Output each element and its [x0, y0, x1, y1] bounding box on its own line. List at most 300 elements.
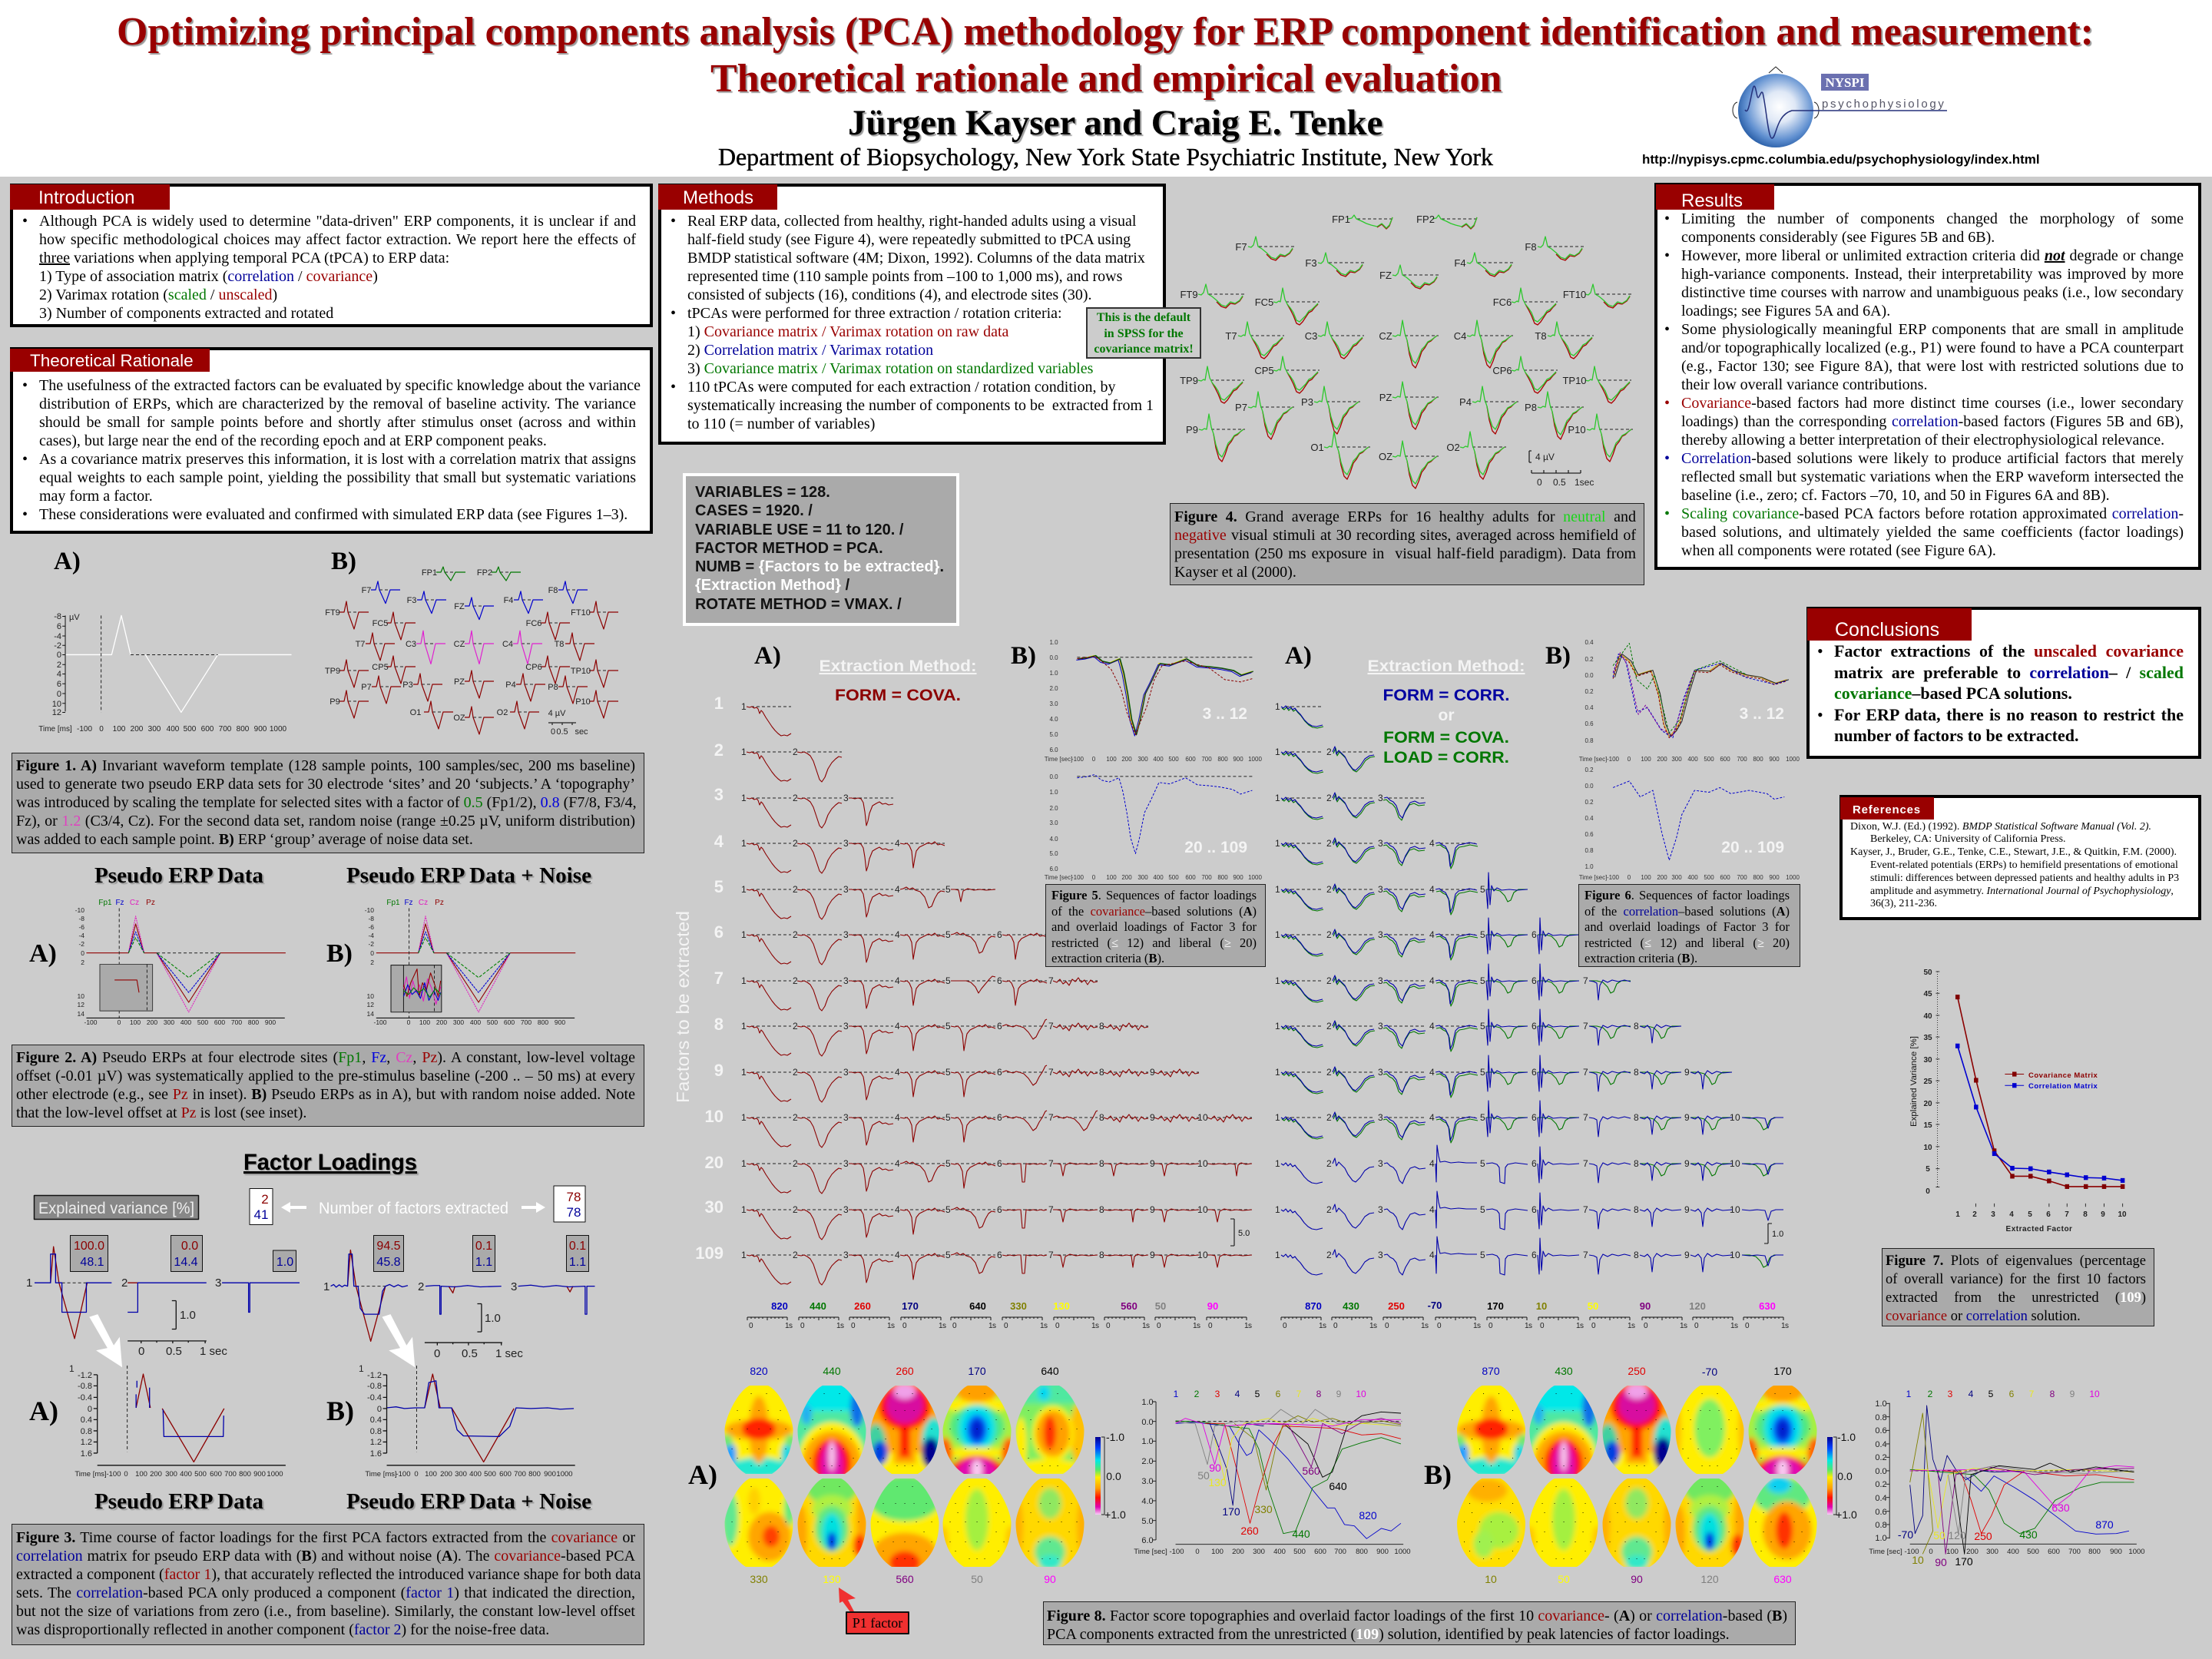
- figure 2 tick labels: -4: [368, 932, 374, 939]
- column 5: [951, 889, 995, 1273]
- figure 7 x tick labels: 10: [2118, 1210, 2127, 1219]
- figure 8A component numbers: 9: [1336, 1389, 1342, 1399]
- figure 8B component numbers: 4: [1969, 1389, 1974, 1399]
- spss syntax box: CASES = 1920. /: [695, 502, 813, 519]
- figure 8B map labels: [1482, 1365, 1792, 1585]
- panel: theoretical rationale: [10, 347, 653, 534]
- caption: figure 4: presentation (250 ms exposure in visual half-field paradigm). Data from: [1174, 545, 1636, 562]
- figure 1A axis labels: 2: [57, 661, 61, 670]
- figure 8B topography maps: [1445, 1376, 1829, 1576]
- figure 8B tick labels: 800: [2088, 1548, 2101, 1556]
- figure 6 cell numbers: 12345678910: [1275, 1112, 1740, 1123]
- figure 8A component numbers: 4: [1235, 1389, 1240, 1399]
- figure 6 extraction method: FORM = CORR.: [1382, 687, 1510, 704]
- caption: figure 1: [12, 753, 644, 853]
- figure 7 x tick labels: 8: [2083, 1210, 2088, 1219]
- figure 3 tick labels: -1.2: [367, 1371, 382, 1380]
- figure 5 panel labels: A): [754, 642, 781, 670]
- figure 4 electrode labels: CZ: [1379, 330, 1392, 342]
- figure 8B chart value labels: [1898, 1502, 2114, 1568]
- figure 3 tick labels: 1.2: [370, 1438, 382, 1447]
- figure 5B tick labels: 4.0: [1049, 836, 1058, 843]
- figure 2 heading right: Pseudo ERP Data + Noise: [346, 863, 591, 888]
- figure 1B electrode labels: FP2: [477, 568, 492, 578]
- figure 8A map labels: 640: [1041, 1365, 1059, 1377]
- figure 3 tick labels: 0.4: [370, 1416, 382, 1425]
- figure 8B tick labels: 1000: [2128, 1548, 2145, 1556]
- figure 1A axis labels: 0: [57, 651, 61, 660]
- figure 8 panel A label: A): [688, 1459, 717, 1490]
- figure 5 peak latency labels: 820: [771, 1300, 788, 1312]
- figure 6 peak latency labels: 870: [1305, 1300, 1322, 1312]
- references text: Dixon, W.J. (Ed.) (1992). BMDP Statistical Software Manual (Vol. 2).: [1850, 821, 2151, 833]
- figure 5B tick labels: 500: [1168, 874, 1179, 881]
- figure 2 tick labels: Fz: [115, 899, 124, 907]
- figure 8B overlaid loadings chart: [1869, 1389, 2145, 1568]
- figure 5 cell numbers: 1: [741, 701, 747, 712]
- caption: figure 6: Figure 6. Sequences of factor loadings: [1584, 888, 1790, 902]
- conclusions heading: [1807, 608, 1972, 641]
- figure 1A axis labels: 900: [254, 725, 267, 733]
- figure 6B tick labels: -100: [1607, 874, 1620, 881]
- figure 8A tick labels: 100: [1211, 1548, 1224, 1556]
- figure 1A axis labels: Time [ms]: [38, 725, 72, 733]
- column 4: [1435, 843, 1478, 1273]
- methods heading: [658, 184, 777, 210]
- figure 1A axis labels: 4: [57, 670, 61, 679]
- conclusions text: matrix are preferable to correlation– / scaled: [1834, 663, 2184, 682]
- caption: figure 3: was disproportionally reflected in another component (factor 2) for the noise-free data.: [16, 1621, 549, 1638]
- figure 6 cell numbers: 1234567: [1275, 975, 1588, 986]
- figure 4 electrode labels: [1180, 214, 1587, 462]
- figure 6B tick labels: 800: [1753, 874, 1763, 881]
- figure 5B tick labels: 800: [1217, 756, 1228, 763]
- logo: [1733, 67, 1947, 147]
- figure 1B electrode labels: CZ: [454, 640, 465, 649]
- figure 5 peak latency labels: 170: [902, 1300, 919, 1312]
- results text: (e.g., Factor 130; see Figure 8A), that were lost with restricted solutions due to: [1681, 358, 2184, 375]
- figure 8B tick labels: -100: [1904, 1548, 1919, 1556]
- figure 6B tick labels: Time [sec]: [1579, 756, 1607, 763]
- figure 8B tick labels: 0.8: [1875, 1413, 1887, 1422]
- figure 8B chart value labels: 870: [2095, 1518, 2114, 1531]
- figure 6B tick labels: 900: [1769, 874, 1780, 881]
- figure 8B chart value labels: 630: [2051, 1502, 2070, 1514]
- figure 1A waveform template chart: [38, 612, 292, 733]
- caption: figure 2: offset (-0.01 µV) was systematically applied to the pre-stimulus baseline (-200 .. – 50 ms) at every: [16, 1068, 635, 1084]
- figure 8A component numbers: [1174, 1389, 1366, 1399]
- results text: reflected small but systematic variations when the ERP waveform intersected the: [1681, 469, 2184, 485]
- caption: figure 1: Fz), or 1.2 (C3/4, Cz). For the second data set, random noise (range ±0.25 µV, uniform distribution): [16, 813, 635, 830]
- figure 3 tick labels: 600: [499, 1470, 512, 1479]
- figure 8B tick labels: 700: [2068, 1548, 2081, 1556]
- figure 1B electrode labels: PZ: [454, 677, 465, 687]
- methods text: consisted of subjects (16), conditions (4), and electrode sites (30).: [687, 286, 1092, 303]
- figure 7 y tick labels: 15: [1923, 1121, 1932, 1130]
- caption: figure 1: used to generate two pseudo ERP data sets for 30 electrode ‘sites’ and 20 ‘subjects.’ A ‘topography’: [16, 776, 635, 793]
- figure 6B tick labels: 0.0: [1584, 783, 1594, 790]
- figure 8A tick labels: 1000: [1394, 1548, 1411, 1556]
- figure 5 panel labels: B): [1011, 642, 1036, 670]
- figure 2 tick labels: 0: [407, 1018, 411, 1026]
- introduction heading: [10, 184, 170, 210]
- figure 8A map labels: 260: [896, 1365, 914, 1377]
- figure 8B tick labels: 0.4: [1875, 1440, 1887, 1449]
- column 8: [1640, 1025, 1681, 1272]
- panel: theoretical rationale: •: [22, 451, 28, 468]
- theoretical rationale text: cases), but large near the end of the recording epoch and at ERP component peaks.: [39, 432, 547, 449]
- figure 7 x tick labels: 1: [1955, 1210, 1960, 1219]
- figure 5 cell numbers: [741, 701, 1208, 1260]
- panel: results: •: [1664, 210, 1670, 227]
- figure 4 electrode labels: FC5: [1255, 296, 1273, 308]
- figure 1A axis labels: 300: [148, 725, 161, 733]
- panel: methods: •: [671, 379, 676, 396]
- figure 6B tick labels: 0.4: [1584, 815, 1594, 822]
- figure 8A component numbers: 2: [1194, 1389, 1200, 1399]
- figure 3 tick labels: 700: [514, 1470, 526, 1479]
- row labels: factors to be extracted: 9: [714, 1061, 724, 1080]
- caption: figure 8: Figure 8. Factor score topographies and overlaid factor loadings of the first 10 covariance- (A) or correlation-based (B): [1047, 1607, 1787, 1624]
- figure 3 factor waveforms: [26, 1247, 594, 1479]
- figure 7 x tick labels: 7: [2065, 1210, 2069, 1219]
- figure 3 tick labels: 300: [455, 1470, 467, 1479]
- figure 4 electrode labels: C3: [1305, 330, 1317, 342]
- figure 3 tick labels: 500: [484, 1470, 496, 1479]
- figure 6B tick labels: -100: [1607, 756, 1620, 763]
- figure 4 electrode labels: TP9: [1180, 375, 1198, 386]
- caption: figure 3: correlation matrix for pseudo ERP data with (B) and without noise (A). The covariance-based PCA: [16, 1548, 635, 1565]
- figure 5 panel labels: [754, 642, 1036, 670]
- figure 6 extraction method: LOAD = CORR.: [1383, 749, 1509, 767]
- figure 7 x tick labels: 2: [1972, 1210, 1977, 1219]
- figure 7 x tick labels: 6: [2046, 1210, 2051, 1219]
- figure 3 tick labels: 0.4: [81, 1416, 92, 1425]
- figure 8A colour scale: -1.0: [1106, 1431, 1124, 1443]
- panel: results: •: [1664, 450, 1670, 467]
- figure 5 time axes: [747, 1317, 1252, 1330]
- theoretical rationale heading: [10, 349, 210, 372]
- figure 3 tick labels: 600: [210, 1470, 222, 1479]
- figure 1A axis labels: 500: [184, 725, 197, 733]
- figure 5B tick labels: 600: [1185, 756, 1196, 763]
- explained variance value boxes: 45.8: [376, 1256, 401, 1269]
- figure 3 chart labels: 3: [215, 1277, 221, 1290]
- figure 5B tick labels: 400: [1153, 756, 1164, 763]
- conclusions text: For ERP data, there is no reason to restrict the: [1834, 705, 2184, 724]
- figure 5B tick labels: 3.0: [1049, 820, 1058, 826]
- figure 5 cell numbers: 12345678910: [741, 1158, 1208, 1169]
- figure 1B electrode labels: TP10: [571, 667, 591, 676]
- figure 5B tick labels: 0.0: [1049, 654, 1058, 661]
- figure 4 electrode labels: FP2: [1416, 214, 1435, 225]
- figure 3 tick labels: 100: [425, 1470, 437, 1479]
- spss syntax box: [683, 473, 959, 626]
- figure 3 tick labels: 0: [414, 1470, 419, 1479]
- theoretical rationale text: equal weights to each sample point, yielding the possibility that small but systematic variations: [39, 469, 636, 486]
- figure 7 y axis title: Explained Variance [%]: [1909, 1036, 1919, 1127]
- figure 6B tick labels: 100: [1641, 874, 1651, 881]
- figure 7 y tick labels: 20: [1923, 1100, 1932, 1108]
- spss syntax box: FACTOR METHOD = PCA.: [695, 540, 883, 557]
- introduction text: [22, 213, 636, 322]
- row labels: factors to be extracted: 10: [705, 1107, 724, 1126]
- figure 4 electrode labels: T7: [1225, 330, 1237, 342]
- panel: results: •: [1664, 321, 1670, 338]
- figure 4 scale labels: [1535, 452, 1594, 488]
- figure 6 peak latency labels: 630: [1759, 1300, 1776, 1312]
- figure 6B tick labels: 0.2: [1584, 767, 1594, 773]
- references heading: References: [1853, 803, 1921, 816]
- figure 8A colour scale: [1095, 1431, 1126, 1521]
- figure 3 tick labels: 100: [135, 1470, 147, 1479]
- introduction text: how specific methodological choices may affect factor extraction. We report here the effects of: [39, 231, 636, 248]
- figure 8B chart value labels: 120: [1948, 1529, 1966, 1541]
- spss syntax box: VARIABLE USE = 11 to 120. /: [695, 522, 903, 538]
- figure 5B tick labels: 400: [1153, 874, 1164, 881]
- caption: figure 5: extraction criteria (B).: [1051, 951, 1164, 965]
- figure 6B tick labels: 0.8: [1584, 737, 1594, 744]
- figure 5 peak latency labels: 560: [1121, 1300, 1137, 1312]
- figure 2 tick labels: -8: [78, 915, 84, 922]
- column 9: [1690, 1071, 1732, 1272]
- figure 8B component numbers: 2: [1928, 1389, 1933, 1399]
- figure 8A tick labels: 500: [1293, 1548, 1306, 1556]
- panel: methods: [658, 184, 1166, 445]
- figure 5B tick labels: 2.0: [1049, 685, 1058, 692]
- figure 2 tick labels: 500: [197, 1018, 208, 1026]
- figure 6 scale bar: 1.0: [1772, 1230, 1783, 1239]
- panel: references: [1839, 795, 2201, 920]
- row labels: factors to be extracted: 8: [714, 1015, 724, 1034]
- figure 7 y tick labels: 40: [1923, 1012, 1932, 1021]
- figure 3 tick labels: 1.2: [81, 1438, 92, 1447]
- figure 5 cell numbers: 1234567: [741, 975, 1054, 986]
- figure 4 electrode labels: CP6: [1492, 365, 1512, 376]
- figure 1A axis labels: -8: [54, 612, 61, 621]
- figure 8B tick labels: 0.2: [1875, 1453, 1887, 1462]
- figure 2 tick labels: 10: [367, 992, 374, 1000]
- introduction text: three variations when applying temporal PCA (tPCA) to ERP data:: [39, 250, 449, 267]
- figure 3 panel labels: B): [326, 1396, 354, 1426]
- figure 5 rotated axis title: Factors to be extracted: [673, 911, 693, 1103]
- figure 8B map labels: 170: [1773, 1365, 1792, 1377]
- figure 3 chart labels: 3: [511, 1280, 517, 1293]
- figure 5B tick labels: 200: [1121, 756, 1132, 763]
- figure 6B tick labels: 0.2: [1584, 656, 1594, 663]
- explained variance value boxes: 100.0: [74, 1240, 104, 1253]
- theoretical rationale text: distribution of ERPs, which are characterized by the removal of baseline activity. The variance: [39, 396, 636, 412]
- figure 5B tick labels: 1000: [1248, 756, 1262, 763]
- figure 5 cell numbers: 123456: [741, 929, 1002, 940]
- figure 3 tick labels: 400: [469, 1470, 482, 1479]
- figure 8A colour scale: +1.0: [1104, 1508, 1126, 1521]
- figure 8A tick labels: 400: [1273, 1548, 1286, 1556]
- figure 3 chart labels: 1 sec: [495, 1347, 523, 1360]
- figure 8A tick labels: 5.0: [1141, 1517, 1154, 1526]
- figure 5 cell numbers: 123456789: [741, 1067, 1155, 1078]
- figure 2 tick labels: -2: [78, 940, 84, 948]
- caption: figure 3: Figure 3. Time course of factor loadings for the first PCA factors extracted from the covariance or: [16, 1529, 635, 1546]
- row labels: factors to be extracted: 20: [705, 1153, 724, 1172]
- figure 2 tick labels: Cz: [130, 899, 139, 907]
- caption: figure 6: restricted (≤ 12) and liberal (≥ 20): [1584, 935, 1790, 950]
- figure 6B tick labels: 200: [1657, 874, 1667, 881]
- figure 3 chart labels: [26, 1277, 523, 1374]
- callout: spss default: [1086, 307, 1201, 359]
- figure 7 y tick labels: 0: [1926, 1187, 1930, 1196]
- figure 5 cell numbers: 12345: [741, 884, 951, 895]
- figure 5 peak latency labels: 330: [1010, 1300, 1027, 1312]
- row labels: factors to be extracted: 3: [714, 785, 724, 804]
- p1 factor arrow: [839, 1588, 856, 1613]
- figure 2 tick labels: 100: [419, 1018, 430, 1026]
- figure 1A axis labels: -100: [77, 725, 92, 733]
- figure 4 electrode labels: C4: [1454, 330, 1466, 342]
- figure 8B tick labels: 900: [2110, 1548, 2122, 1556]
- figure 2 tick labels: 700: [231, 1018, 242, 1026]
- figure 2 tick labels: Fp1: [98, 899, 112, 907]
- figure 8B tick labels: 300: [1986, 1548, 1998, 1556]
- figure 6A factor loading grid: [1275, 701, 1783, 1275]
- figure 8A tick labels: 900: [1376, 1548, 1389, 1556]
- column 2: [797, 752, 842, 1285]
- figure 8A overlaid loadings chart: [1134, 1389, 1411, 1556]
- figure 8B component numbers: 7: [2029, 1389, 2035, 1399]
- theoretical rationale text: The usefulness of the extracted factors can be evaluated by specific knowledge about the variance: [39, 377, 641, 394]
- column 10: [1742, 1118, 1783, 1267]
- figure 6B tick labels: 800: [1753, 756, 1763, 763]
- figure 6B tick labels: 0.6: [1584, 831, 1594, 838]
- figure 8B map labels: 870: [1482, 1365, 1500, 1377]
- figure 8A chart value labels: 440: [1292, 1528, 1310, 1540]
- figure 8B chart value labels: 10: [1912, 1554, 1924, 1566]
- figure 5B tick labels: Time [sec]: [1045, 756, 1072, 763]
- column 10: [1207, 1114, 1252, 1267]
- figure 2 tick labels: Pz: [435, 899, 444, 907]
- red callout arrow: [1058, 333, 1090, 359]
- caption: figure 5: and overlaid loadings of Factor 3 for: [1051, 919, 1257, 934]
- figure 5B range labels: 20 .. 109: [1184, 839, 1247, 856]
- figure 6B tick labels: 500: [1704, 874, 1714, 881]
- introduction text: Although PCA is widely used to determine "data-driven" ERP components, it is unclear if and: [39, 213, 636, 230]
- figure 8A component numbers: 7: [1296, 1389, 1302, 1399]
- figure 6B tick labels: 1000: [1786, 874, 1800, 881]
- column 8: [1104, 1023, 1148, 1267]
- figure 1B electrode labels: CP5: [372, 663, 389, 672]
- figure 8A tick labels: 700: [1334, 1548, 1346, 1556]
- figure 4 scale bar: [1529, 451, 1594, 488]
- caption: figure 2: other electrode (e.g., see Pz in inset). B) Pseudo ERPs as in A), but with random noise added. Note: [16, 1086, 635, 1103]
- figure 8B tick labels: 500: [2027, 1548, 2039, 1556]
- figure 2 tick labels: -6: [368, 923, 374, 931]
- figure 1A axis labels: 1000: [270, 725, 287, 733]
- nyspi badge: [1821, 74, 1869, 91]
- figure 2 tick labels: 400: [470, 1018, 481, 1026]
- figure 7 y tick labels: 50: [1923, 969, 1932, 977]
- figure 8A component numbers: 1: [1174, 1389, 1179, 1399]
- figure 2 tick labels: 100: [130, 1018, 141, 1026]
- references text: 36(3), 211-236.: [1870, 898, 1937, 909]
- figure 3 tick labels: 0: [124, 1470, 128, 1479]
- results text: However, more liberal or unlimited extraction criteria did not degrade or change: [1681, 247, 2184, 264]
- figure 6B range labels: 3 .. 12: [1740, 705, 1784, 723]
- figure 2 tick labels: -10: [365, 906, 374, 914]
- results text: thereby allowing a better interpretation of their electrophysiological relevance.: [1681, 432, 2164, 449]
- results text: [1664, 210, 2184, 559]
- figure 6 panel labels: A): [1285, 642, 1312, 670]
- references heading: [1840, 797, 1934, 820]
- figure 7 x tick labels: [1955, 1210, 2127, 1233]
- figure 2 tick labels: 900: [555, 1018, 565, 1026]
- figure 6 panel labels: [1285, 642, 1571, 670]
- figure 3 chart labels: 1: [359, 1363, 364, 1374]
- figure 6B tick labels: 500: [1704, 756, 1714, 763]
- column 2: [1333, 747, 1375, 1273]
- figure 6 peak latency labels: 10: [1536, 1300, 1547, 1312]
- results text: and/or topographically localized (e.g., P1) were found to have a PCA counterpart: [1681, 339, 2184, 356]
- figure 3 tick labels: 900: [544, 1470, 556, 1479]
- figure 4 electrode labels: T8: [1535, 330, 1547, 342]
- figure 6 cell numbers: 12345678910: [1275, 1250, 1740, 1260]
- figure 8B component numbers: 5: [1988, 1389, 1994, 1399]
- figure 5 peak latency labels: 50: [1155, 1300, 1166, 1312]
- caption: figure 8: [1043, 1601, 1796, 1645]
- figure 2 tick labels: 2: [81, 959, 84, 966]
- figure 2 tick labels: 14: [78, 1010, 84, 1018]
- caption: figure 5: Figure 5. Sequences of factor loadings: [1051, 888, 1257, 902]
- conclusions heading: Conclusions: [1835, 619, 1939, 641]
- figure 8B tick labels: 0.4: [1875, 1494, 1887, 1503]
- figure 1B electrode labels: T8: [555, 640, 564, 649]
- figure 4 electrode labels: FT9: [1180, 289, 1198, 300]
- figure 1A axis labels: 200: [131, 725, 144, 733]
- figure 8A component numbers: 5: [1255, 1389, 1260, 1399]
- figure 6 cell numbers: 12: [1275, 747, 1332, 757]
- figure 5 peak latency labels: 90: [1207, 1300, 1218, 1312]
- figure 5 peak latency labels: 260: [854, 1300, 871, 1312]
- figure 1A axis labels: 600: [201, 725, 214, 733]
- caption: figure 6: [1578, 884, 1800, 967]
- figure 8B component numbers: 3: [1948, 1389, 1953, 1399]
- figure 1B electrode labels: O1: [410, 708, 421, 717]
- figure 4 waveforms: [1180, 214, 1633, 488]
- figure 8B component numbers: 10: [2089, 1389, 2100, 1399]
- figure 8A tick labels: 300: [1253, 1548, 1265, 1556]
- figure 6B tick labels: 1000: [1786, 756, 1800, 763]
- url: http://nypisys.cpmc.columbia.edu/psychophysiology/index.html: [1642, 152, 2040, 167]
- explained variance value boxes: 14.4: [174, 1256, 198, 1269]
- figure 2 tick labels: -2: [368, 940, 374, 948]
- figure 8A chart value labels: 90: [1209, 1462, 1221, 1474]
- figure 1A axis labels: µV: [69, 613, 80, 622]
- figure 6 cell numbers: 12345: [1275, 884, 1485, 895]
- figure 1A axis labels: 100: [113, 725, 126, 733]
- figure 6B tick labels: 900: [1769, 756, 1780, 763]
- figure 1A axis labels: 12: [52, 708, 61, 717]
- figure 8A topography maps: [713, 1376, 1096, 1576]
- conclusions text: [1817, 641, 2184, 745]
- header band: [0, 0, 2212, 177]
- figure 8B tick labels: 600: [2048, 1548, 2060, 1556]
- figure 2 tick labels: [75, 899, 565, 1026]
- caption: figure 3: sets. The correlation-based PCA only produced a component (factor 1) that indicated the direction,: [16, 1584, 635, 1601]
- figure 5 axis tick labels: 01s01s01s01s01s01s01s01s01s01s: [749, 1322, 1252, 1330]
- column 9: [1154, 1069, 1199, 1267]
- figure 3 tick labels: 0: [377, 1405, 382, 1414]
- figure 1B electrode labels: P10: [575, 697, 591, 707]
- figure 6B tick labels: Time [sec]: [1579, 874, 1607, 881]
